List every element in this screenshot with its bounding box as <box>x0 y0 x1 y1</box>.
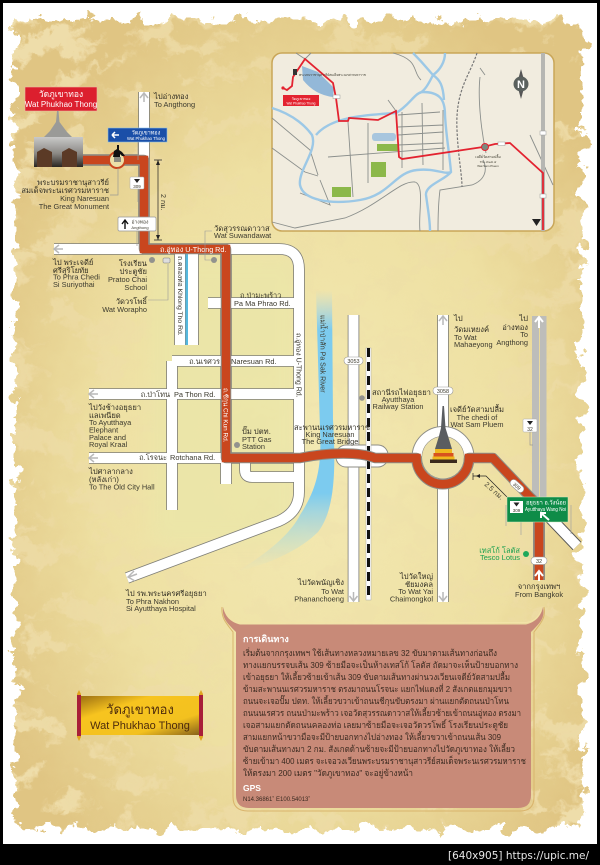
road sign: blue Wat Phukhao Thong: วัดภูเขาทอง <box>132 130 161 136</box>
label: to Elephant Palace: To Ayutthaya <box>89 418 132 427</box>
label: to Angthong north <box>153 92 195 109</box>
gold banner <box>80 696 200 735</box>
label: to old city hall: ไปศาลากลาง <box>88 467 133 476</box>
road sign: 309 shield: 309 <box>133 184 141 189</box>
Pa Sak River label: แม่น้ำป่าสัก Pa Sak River <box>318 315 330 393</box>
Naresuan label <box>189 357 277 366</box>
label: to Wat Mahaeyong: ไป <box>453 314 463 323</box>
label: Ayutthaya railway station with marker: Ayutthaya <box>382 395 415 404</box>
highway 32 <box>532 316 546 506</box>
label: from Bangkok <box>515 582 563 599</box>
road badge: 3058: 3058 <box>437 389 449 395</box>
left roll <box>77 690 81 741</box>
diagonal road beyond the junction <box>535 502 577 546</box>
right roll <box>199 690 203 741</box>
label: Ayutthaya railway station with marker <box>359 388 431 411</box>
diagonal road surface <box>535 502 577 546</box>
label: to old city hall: (หลังเก่า) <box>89 475 119 484</box>
inset map railway <box>457 53 477 187</box>
label: Tesco Lotus with marker <box>479 546 529 562</box>
directions text: ซ้ายเข้ามา 400 เมตร จะเจอวงเวียนพระบรมราชานุสาวรีย์สมเด็จพระนเรศวรมหาราช <box>243 755 526 767</box>
label: to Angthong north: To Angthong <box>154 100 195 109</box>
road sign: blue Wat Phukhao Thong <box>108 128 167 142</box>
sign posts <box>110 142 138 246</box>
label: to old city hall <box>88 467 155 492</box>
label: to Phra Chedi Si Suriyothai: ไป พระเจดีย์ <box>52 258 93 267</box>
label: to Elephant Palace: Palace and <box>89 433 126 442</box>
icon: inset arrow to Bangkok <box>532 219 541 226</box>
label: to Wat Phananchoeng: To Wat <box>321 587 344 596</box>
label: to Phra Chedi Si Suriyothai <box>52 258 100 289</box>
label: Naresuan bridge: The Great Bridge <box>302 437 358 446</box>
road badge: 309 on diagonal <box>508 478 525 494</box>
label: King Naresuan monument: สมเด็จพระนเรศวรมหาราช <box>21 185 109 195</box>
label: Wat Worapho: Wat Worapho <box>102 305 147 314</box>
label: to Wat Phananchoeng: Phananchoeng <box>294 594 344 604</box>
label: from Bangkok: From Bangkok <box>515 590 563 599</box>
Khlong Tho road label: ถ.คลองท่อ Khlong Tho Rd. <box>176 256 183 336</box>
inset map chedi label: Wat Sam Pluem <box>477 164 499 168</box>
label: Naresuan bridge <box>294 423 370 446</box>
label: Wat Suwandawat with marker: Wat Suwandawat <box>214 231 271 240</box>
banner Thai title: วัดภูเขาทอง <box>106 702 174 718</box>
directions text: เข้าอยุธยา ให้เลี้ยวซ้ายเข้าเส้น 309 ขับตามเส้นทางผ่านวงเวียนเจดีย์วัดสามปลื้ม <box>243 670 510 683</box>
directions text: ข้ามสะพานนเรศวรมหาราช ตรงมาถนนโรจนะ แยกไฟแดงที่ 2 สังเกตแยกมุมขวา <box>243 683 512 695</box>
inset map monument icon <box>293 69 297 75</box>
icon: temple photo <box>34 111 83 167</box>
road casing <box>54 92 443 602</box>
label: to Phra Chedi Si Suriyothai: To Phra Chedi <box>53 272 100 282</box>
icon: King Naresuan monument <box>109 145 125 168</box>
inset map green parcels <box>332 144 398 197</box>
road sign: blue Wat Phukhao Thong: Wat Phukhao Thong <box>127 136 166 141</box>
label: to Wat Yai Chaimongkol: To Wat Yai <box>398 587 433 596</box>
icon: chedi of Wat Sam Pluem <box>430 406 457 463</box>
road sign: green Ayutthaya Wang Noi: Ayutthaya Wang Noi <box>525 507 566 513</box>
route casing <box>83 160 539 580</box>
label: King Naresuan monument: พระบรมราชานุสาวรีย์ <box>37 178 109 187</box>
label: to Angthong east: ไป <box>518 314 528 323</box>
Khlong Tho canal <box>186 253 188 345</box>
label: Pratoo Chai School with marker: ประตูชัย <box>119 267 147 276</box>
inset map destination label: Wat Phukhao Thong <box>287 102 316 106</box>
label: to Elephant Palace: แลเพนียด <box>89 411 121 420</box>
label: to Wat Phananchoeng: ไปวัดพนัญเชิง <box>297 578 344 587</box>
GPS heading: GPS <box>243 783 261 793</box>
banner English title: Wat Phukhao Thong <box>90 720 190 732</box>
directions text <box>243 647 526 779</box>
inset map roundabout <box>482 144 488 150</box>
GPS coordinates: N14.36861˚ E100.54013˚ <box>243 796 310 803</box>
label: PTT gas station with marker: PTT Gas <box>242 435 272 444</box>
label: to Wat Mahaeyong: To Wat <box>454 333 477 342</box>
label: King Naresuan monument: King Naresuan <box>60 194 109 203</box>
label: Ayutthaya railway station with marker: สถานีรถไฟอยุธยา <box>372 388 431 397</box>
label: to Wat Mahaeyong: วัดมเหยงค์ <box>454 325 489 334</box>
road sign: 309 shield <box>130 177 144 189</box>
Pa Thon label: ถ.ป่าโทน <box>141 390 170 399</box>
label: PTT gas station with marker: Station <box>242 442 265 451</box>
distance marker: 2 km: 2 กม. <box>159 194 166 211</box>
label: to Angthong east: To <box>520 330 528 339</box>
inset map route <box>283 59 543 230</box>
label: to Angthong north: ไปอ่างทอง <box>153 92 189 101</box>
label: Tesco Lotus with marker: เทสโก้ โลตัส <box>479 546 520 555</box>
label: to Elephant Palace <box>88 403 141 449</box>
route red line <box>83 160 539 580</box>
Rotchana label <box>139 453 215 462</box>
label: to old city hall: To The Old City Hall <box>89 482 155 492</box>
label: chedi of Wat Sam Pluem: The chedi of <box>457 413 498 422</box>
label: Wat Worapho: วัดวรโพธิ์ <box>116 295 148 306</box>
label: to Wat Mahaeyong: Mahaeyong <box>454 340 493 349</box>
road badge: 3058 <box>433 387 453 395</box>
label: Pratoo Chai School with marker <box>108 257 170 300</box>
directions text: สามแยกหน้าขวามือจะมีป้ายบอกทางไปอ่างทอง ให้เลี้ยวขวาเข้าถนนเส้น 309 <box>243 730 501 742</box>
road badge: 309 on diagonal: 309 <box>511 482 522 492</box>
inset map destination dot <box>281 86 285 90</box>
label: Wat Suwandawat with marker <box>205 224 271 263</box>
road badge: 32 <box>531 557 547 565</box>
label: to Phra Chedi Si Suriyothai: ศรีสุริโยทัย <box>53 266 89 275</box>
road sign: green Ayutthaya Wang Noi <box>506 497 571 535</box>
chart: city road network <box>54 92 577 602</box>
bridge interchange <box>336 445 388 467</box>
label: chedi of Wat Sam Pluem: Wat Sam Pluem <box>450 420 504 429</box>
label: to Ayutthaya hospital: To Phra Nakhon <box>126 597 179 606</box>
destination marker: red title label <box>25 87 97 111</box>
label: to Wat Yai Chaimongkol <box>390 572 434 604</box>
label: King Naresuan monument: The Great Monument <box>39 202 109 211</box>
directions panel outer trim <box>222 607 544 811</box>
label: to Wat Yai Chaimongkol: ไปวัดใหญ่ <box>399 572 434 581</box>
road sign: 32 shield: 32 <box>527 427 533 433</box>
label: to Ayutthaya hospital: Si Ayutthaya Hospital <box>126 604 196 613</box>
inset map destination label <box>283 95 319 106</box>
label: King Naresuan monument <box>21 178 109 211</box>
U-Thong road label: ถ.อู่ทอง U-Thong Rd. <box>160 245 226 254</box>
Rotchana label: Rotchana Rd. <box>170 453 215 462</box>
road sign: green Ayutthaya Wang Noi: 309 <box>513 508 521 513</box>
panel: inset overview map <box>272 53 554 231</box>
directions text: เจอสามแยกตัดถนนคลองท่อ เลยมาซ้ายมือจะเจอวัดวรโพธิ์ โรงเรียนประตูชัย <box>243 719 508 731</box>
label: PTT gas station with marker: ปั๊ม ปตท. <box>242 426 271 436</box>
label: to Elephant Palace: ไปวังช้างอยุธยา <box>88 403 141 412</box>
inset map city lake <box>372 133 396 141</box>
river Pa Sak <box>236 290 334 572</box>
inset map lake <box>302 66 334 97</box>
label: to Angthong east: Angthong <box>496 338 528 347</box>
directions text: เริ่มต้นจากกรุงเทพฯ ใช้เส้นทางหลวงหมายเลข 32 ขับมาตามเส้นทางก่อนถึง <box>243 647 497 659</box>
label: Tesco Lotus with marker: Tesco Lotus <box>480 553 520 562</box>
label: to Ayutthaya hospital: ไป รพ.พระนครศรีอยุธยา <box>125 589 207 598</box>
inset map chedi label <box>475 154 501 168</box>
directions heading: การเดินทาง <box>243 634 289 644</box>
distance marker: 2.5 km <box>473 473 507 502</box>
footer: image host watermark: [640x905] https://upic.me/ <box>448 850 589 862</box>
panel: directions <box>222 607 544 811</box>
directions text: ถนนนเรศวร ถนนป่ามะพร้าว เจอวัดสุวรรณดาวาสให้เลี้ยวซ้ายเข้าถนนอู่ทอง ตรงมา <box>243 706 521 719</box>
destination marker: red title label: วัดภูเขาทอง <box>39 89 83 100</box>
inset map chedi label: The chedi of <box>480 160 496 164</box>
Rotchana label: ถ.โรจนะ <box>139 453 167 462</box>
label: PTT gas station with marker <box>234 426 272 451</box>
inset map river <box>272 53 451 231</box>
destination marker: red title label: Wat Phukhao Thong <box>25 100 97 109</box>
Bangkok approach casing <box>533 505 545 580</box>
Naresuan label: Naresuan Rd. <box>231 357 277 366</box>
inset map background <box>272 53 554 231</box>
label: Ayutthaya railway station with marker: Railway Station <box>373 402 423 411</box>
label: Pratoo Chai School with marker: Pratoo Chai <box>108 275 147 284</box>
distance marker: 2.5 km: 2.5 กม. <box>483 481 504 502</box>
road surface <box>54 92 443 602</box>
directions text: ขับตามเส้นทางมา 2 กม. สังเกตด้านซ้ายจะมีป้ายบอกทางไปวัดภูเขาทอง ให้เลี้ยว <box>243 742 515 755</box>
inset map highway markers <box>333 95 546 198</box>
label: to Wat Phananchoeng <box>294 578 344 604</box>
label: from Bangkok: จากกรุงเทพฯ <box>518 582 560 591</box>
label: to Wat Yai Chaimongkol: ชัยมงคล <box>405 580 433 589</box>
directions panel scroll shape <box>223 607 544 808</box>
road badge: 3053 <box>344 357 363 365</box>
road sign: to Angthong: อ่างทอง <box>132 220 149 226</box>
label: Wat Worapho <box>102 295 148 314</box>
inset map highway <box>541 53 545 231</box>
label: Wat Suwandawat with marker: วัดสุวรรณดาวาส <box>214 224 270 233</box>
directions text: ทางแยกบรรจบเส้น 309 ซ้ายมือจะเป็นห้างเทสโก้ โลตัส ถัดมาจะเห็นป้ายบอกทาง <box>243 659 518 670</box>
road sign: green Ayutthaya Wang Noi: อยุธยา อ.วังน้อย <box>526 500 566 506</box>
inset map destination label: วัดภูเขาทอง <box>292 97 311 101</box>
inset map chedi label: เจดีย์วัดสามปลื้ม <box>475 154 501 159</box>
roundabout <box>417 432 469 484</box>
label: to Angthong east <box>496 314 528 347</box>
icon: inset north compass <box>514 69 528 99</box>
road sign: to Angthong: Angthong <box>131 225 149 230</box>
label: to Wat Mahaeyong <box>453 314 493 349</box>
road sign: 32 shield <box>523 419 537 445</box>
title scroll: Wat Phukhao Thong <box>77 690 203 741</box>
railway <box>366 348 371 600</box>
label: to Elephant Palace: Royal Kraal <box>89 440 128 449</box>
label: Pratoo Chai School with marker: โรงเรียน <box>119 259 147 268</box>
background: pale yellow city area <box>150 255 300 545</box>
Pa Ma Phrao label: ถ.ป่ามะพร้าว <box>240 291 281 300</box>
Pa Ma Phrao label <box>234 291 291 308</box>
inset map monument label: พระบรมราชานุสาวรีย์สมเด็จพระนเรศวรมหาราช <box>299 71 367 78</box>
label: to Ayutthaya hospital <box>125 589 207 613</box>
Naresuan label: ถ.นเรศวร <box>189 357 220 366</box>
label: chedi of Wat Sam Pluem <box>450 404 504 429</box>
label: to Wat Yai Chaimongkol: Chaimongkol <box>390 594 433 604</box>
label: Naresuan bridge: สะพานนเรศวรมหาราช <box>294 423 370 432</box>
label: Naresuan bridge: King Naresuan <box>306 430 354 439</box>
icon: inset north compass: N <box>517 79 525 91</box>
distance marker: 2 km <box>154 160 166 240</box>
label: to Angthong east: อ่างทอง <box>502 323 528 332</box>
directions text: ให้ตรงมา 200 เมตร "วัดภูเขาทอง" จะอยู่ข้างหน้า <box>243 768 413 779</box>
footer: black strip <box>0 844 600 865</box>
road badge: 32: 32 <box>536 559 542 565</box>
U-Thong vertical label: ถ.อู่ทอง U-Thong Rd. <box>294 333 302 398</box>
label: Pratoo Chai School with marker: School <box>124 283 147 292</box>
Chi Kun label: ถ.ชีกุน Chi Kun Rd. <box>222 388 230 443</box>
inset map minor roads <box>272 53 553 231</box>
road name labels <box>139 245 330 462</box>
label: chedi of Wat Sam Pluem: เจดีย์วัดสามปลื้ม <box>450 404 504 414</box>
road sign: to Angthong <box>118 217 156 231</box>
road direction arrows <box>54 93 447 601</box>
label: to Elephant Palace: Elephant <box>89 426 118 434</box>
Pa Ma Phrao label: Pa Ma Phrao Rd. <box>234 299 291 308</box>
label: to Phra Chedi Si Suriyothai: Si Suriyothai <box>53 280 95 289</box>
Pa Thon label: Pa Thon Rd. <box>174 390 215 399</box>
Pa Thon label <box>141 390 215 399</box>
white arrows on highway <box>535 317 543 581</box>
road badge: 3053: 3053 <box>347 359 360 365</box>
directions text: ถนนจะเจอปั๊ม ปตท. ให้เลี้ยวขวาเข้าถนนชีกุนขับตรงมา ผ่านแยกตัดถนนป่าโทน <box>243 694 509 707</box>
directions panel top line <box>225 611 541 622</box>
